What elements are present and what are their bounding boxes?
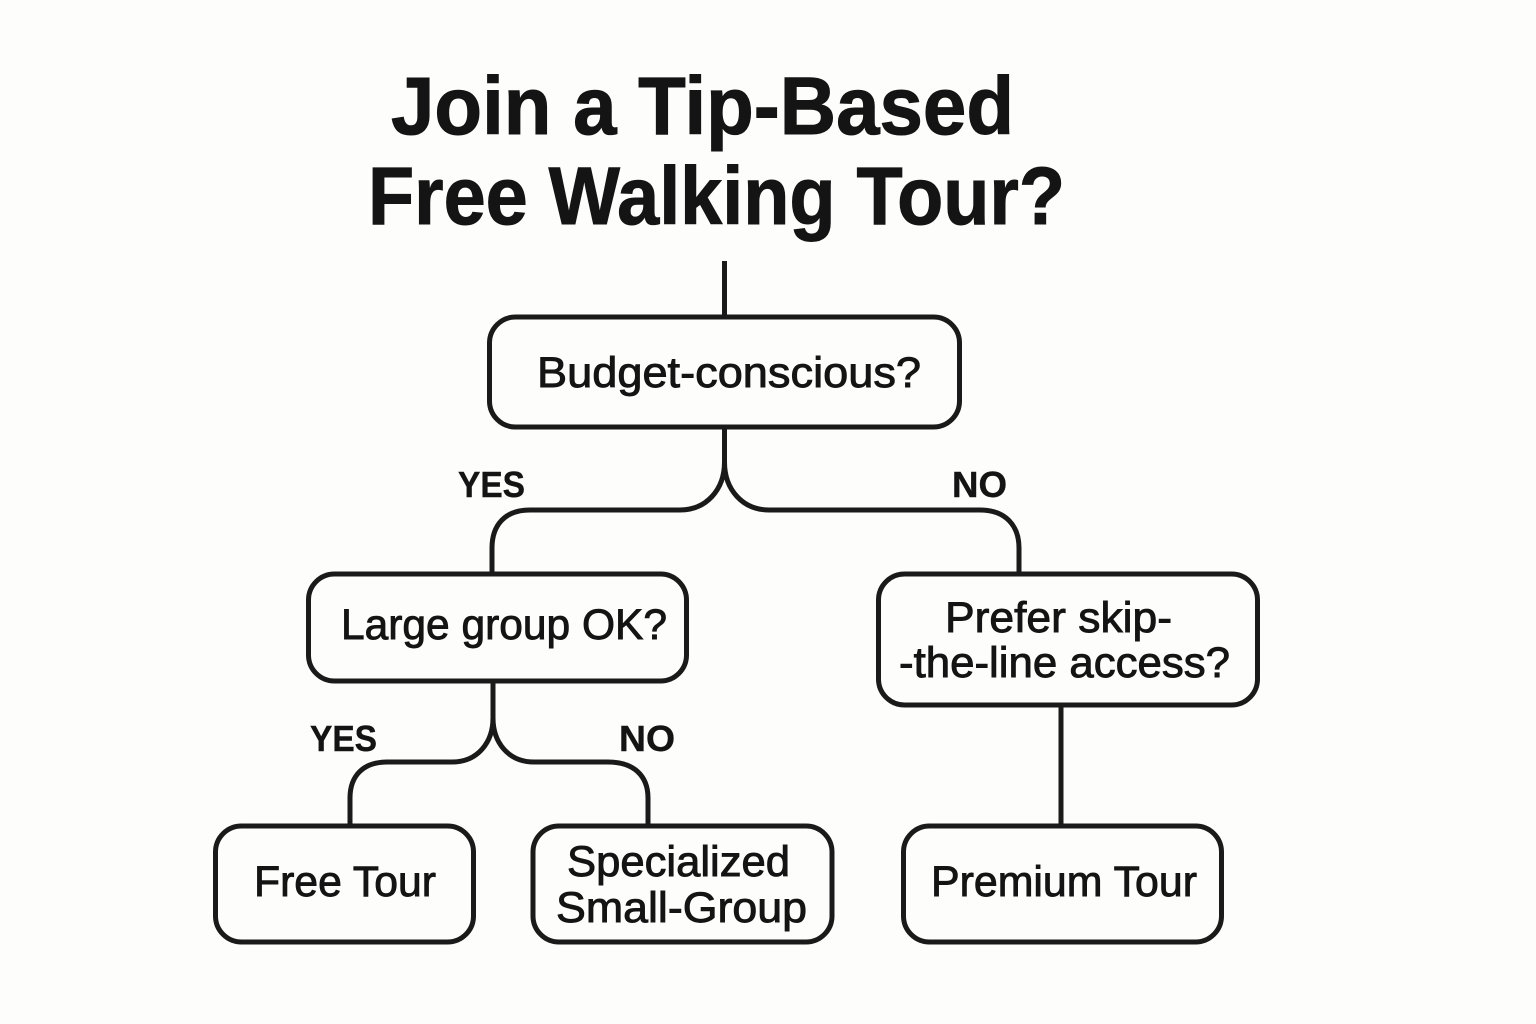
panel: Specialized Small-Group result: Specialized xyxy=(567,838,790,886)
title xyxy=(368,61,1065,242)
arrow: entry line into first question xyxy=(722,261,727,317)
label: NO branch: NO xyxy=(952,464,1007,505)
panel: Budget-conscious question: Budget-conscious? xyxy=(537,349,921,397)
panel: Skip-the-line question xyxy=(878,574,1258,705)
arrow: large group branch to free tour xyxy=(350,681,493,826)
panel: Specialized Small-Group result: Small-Group xyxy=(556,884,807,932)
panel: Premium Tour result xyxy=(904,826,1222,942)
title: Join a Tip-Based xyxy=(391,61,1014,152)
panel: Premium Tour result: Premium Tour xyxy=(931,858,1197,906)
panel: Large group question xyxy=(308,574,686,681)
title: Free Walking Tour? xyxy=(368,151,1065,242)
arrow: budget branch to skip-the-line xyxy=(724,427,1019,574)
arrow: budget branch to large group xyxy=(492,427,724,574)
panel: Free Tour result xyxy=(216,826,474,942)
panel: Free Tour result: Free Tour xyxy=(254,858,436,906)
panel: Specialized Small-Group result xyxy=(533,826,832,942)
arrow: skip-the-line to premium tour xyxy=(1058,705,1064,826)
arrow: large group branch to small group xyxy=(493,681,648,826)
label: YES branch: YES xyxy=(458,464,525,505)
panel: Large group question: Large group OK? xyxy=(341,601,667,649)
panel: Skip-the-line question: Prefer skip- xyxy=(945,594,1172,642)
panel: Budget-conscious question xyxy=(490,317,960,427)
label: NO sub-branch: NO xyxy=(619,718,675,759)
label: YES sub-branch: YES xyxy=(310,718,377,759)
panel: Skip-the-line question: -the-line access? xyxy=(899,639,1230,687)
